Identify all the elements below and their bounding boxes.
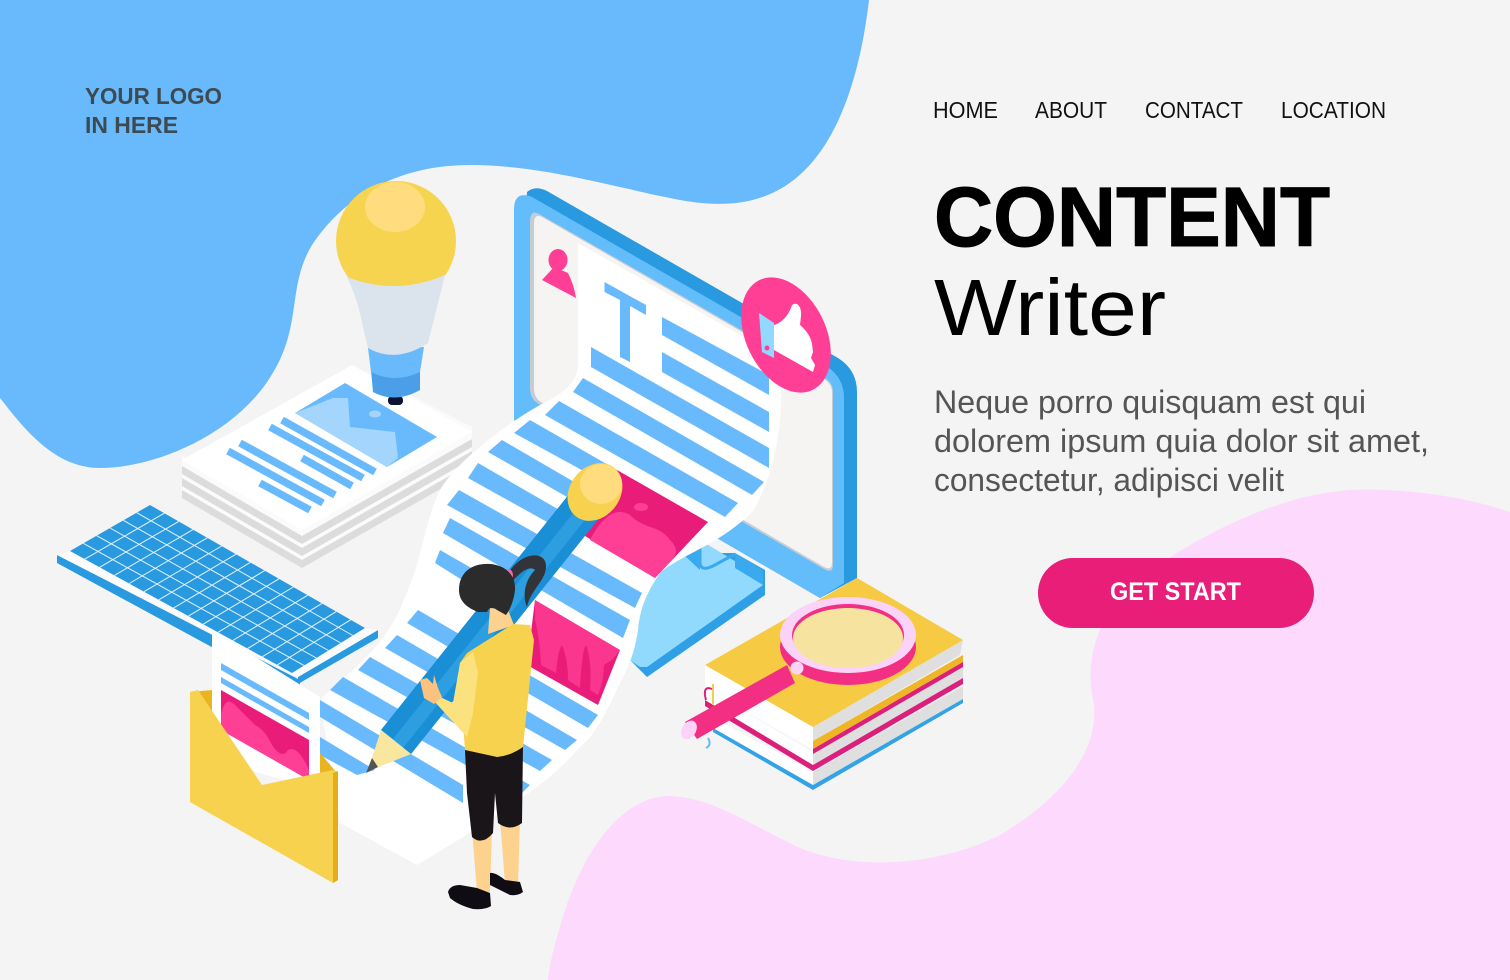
body text [934, 384, 1429, 498]
logo text: YOUR LOGO [85, 83, 222, 109]
envelope body [190, 690, 338, 883]
navigation: LOCATION [1281, 97, 1386, 123]
navigation: HOME [933, 97, 998, 123]
text lines on scroll [320, 282, 769, 803]
woman writing [420, 555, 546, 909]
button: get start [1038, 558, 1314, 628]
keyboard [57, 505, 378, 695]
neck [488, 608, 514, 634]
top yellow book [705, 578, 963, 754]
pink image upper [575, 470, 708, 578]
light bulb [336, 181, 456, 405]
monitor stand [600, 540, 765, 677]
leggings [465, 745, 523, 841]
legs [472, 820, 520, 892]
navigation: CONTACT [1145, 97, 1243, 123]
shoes [448, 873, 523, 909]
body text: consectetur, adipisci velit [934, 462, 1284, 498]
hand [420, 675, 442, 704]
blue background blob [0, 0, 869, 468]
title: Writer [934, 263, 1166, 352]
pink background blob [548, 490, 1510, 980]
logo text: IN HERE [85, 112, 178, 138]
magnifying glass [678, 597, 916, 742]
title [934, 170, 1330, 352]
paper scroll document [320, 243, 781, 865]
ponytail [503, 555, 546, 607]
torso [460, 624, 534, 757]
letter in envelope [190, 630, 338, 883]
arm [433, 652, 478, 737]
bookmark ribbons [705, 684, 713, 748]
monitor [514, 188, 857, 598]
logo text [85, 83, 222, 138]
title: CONTENT [934, 170, 1330, 264]
middle magenta book [705, 666, 963, 771]
pink image lower [527, 600, 620, 705]
paper stack [182, 365, 472, 568]
letter sheet [212, 630, 320, 790]
button: get start: GET START [1110, 578, 1241, 606]
bottom blue book [708, 686, 963, 790]
icon: user [542, 249, 576, 298]
navigation [933, 97, 1386, 123]
hair [459, 564, 515, 615]
pencil [366, 452, 634, 773]
icon: thumbs up badge [723, 263, 849, 407]
navigation: ABOUT [1035, 97, 1107, 123]
book stack [705, 578, 963, 790]
body text: Neque porro quisquam est qui [934, 384, 1366, 420]
body text: dolorem ipsum quia dolor sit amet, [934, 423, 1429, 459]
